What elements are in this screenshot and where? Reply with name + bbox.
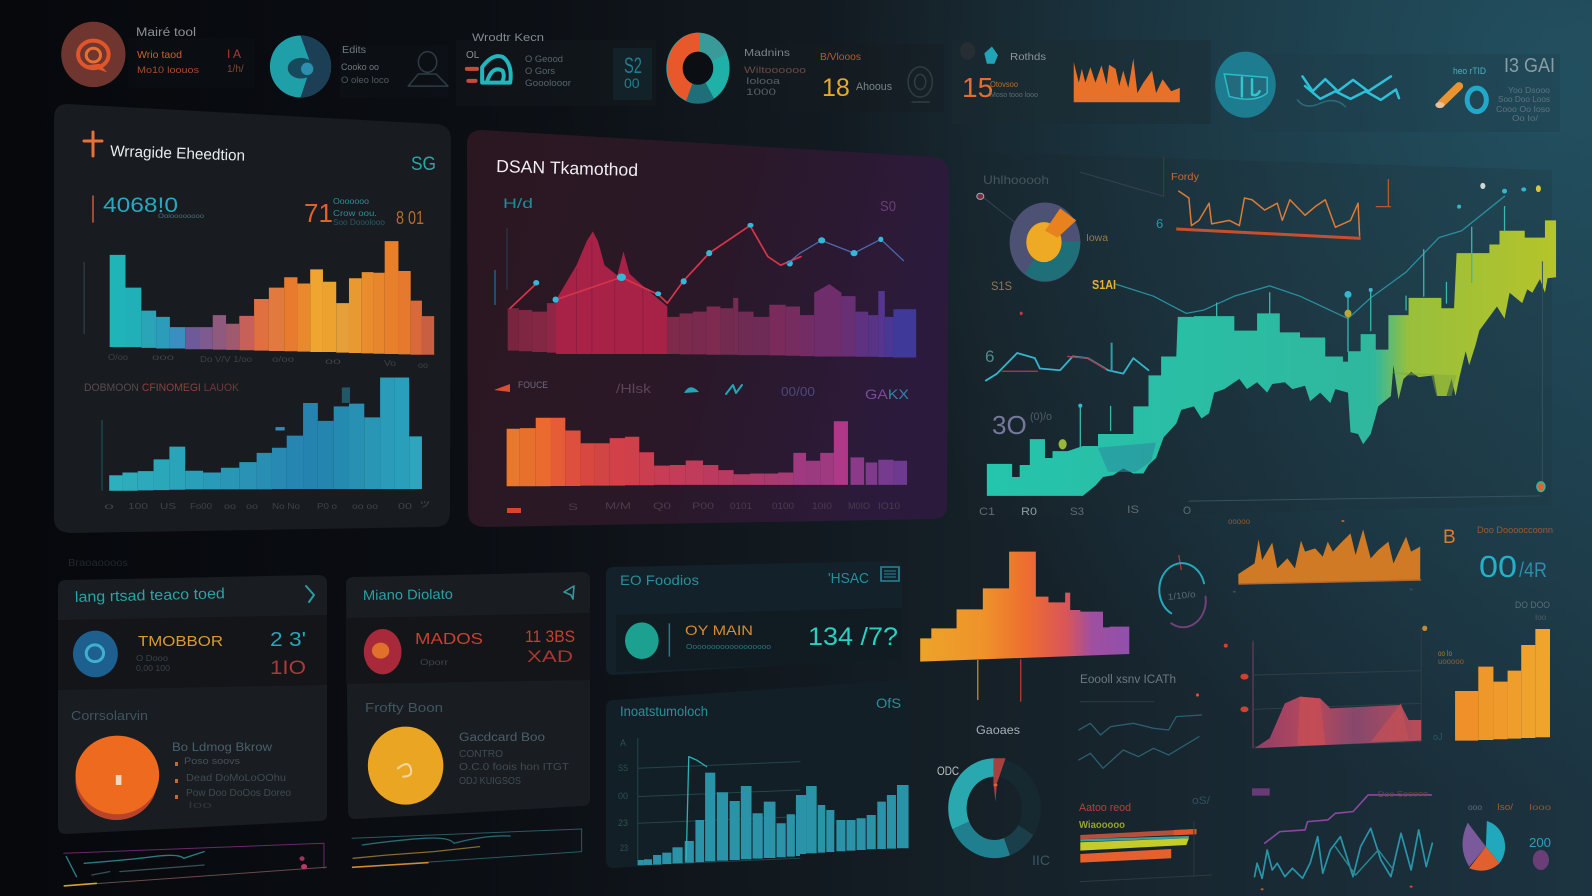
axis labels: 00 xyxy=(618,791,628,801)
metric: OY MAIN: OY MAIN xyxy=(685,622,753,638)
metric: gauge with pencil icon: Yoo Dsooo xyxy=(1508,86,1551,95)
chart: small pie xyxy=(1462,802,1551,871)
metric: OY MAIN: Oooooooooooooooooo xyxy=(686,642,771,651)
metric: gauge with pencil icon: I3 GAI xyxy=(1504,55,1555,77)
icon: blue circle xyxy=(73,631,118,677)
chart: small pie: 200 xyxy=(1529,835,1551,850)
chart: yellow pie with orange slice: 6 xyxy=(1156,216,1163,231)
heading: panel title: DSAN Tkamothod xyxy=(496,156,638,180)
value label: OfS xyxy=(876,695,901,711)
metric: donut label: Iolooa xyxy=(746,76,780,86)
metric row: Ooloooooooo xyxy=(158,214,205,220)
chart: teal donut xyxy=(948,758,1041,858)
metric: B 00: B xyxy=(1443,527,1456,548)
axis labels: bottom chart: 00 xyxy=(398,501,412,511)
chart: horizontal stripes xyxy=(1079,795,1212,882)
legend row: /Hlsk xyxy=(616,381,652,396)
chart title: donut: Gaoaes xyxy=(976,723,1020,737)
metric row: 4068!0 xyxy=(103,194,178,217)
axis labels: A xyxy=(620,738,626,748)
metric: second summary: Edits xyxy=(342,44,366,56)
chart: yellow pie with orange slice: Iowa xyxy=(1086,233,1108,244)
subheading: Corrsolarvin xyxy=(71,708,148,723)
panel: OY MAIN metric card xyxy=(606,561,902,675)
heading: mid lines: Eoooll xsnv ICATh xyxy=(1080,674,1176,686)
metric: second summary: Cooko oo xyxy=(341,62,379,73)
legend text: CONTRO xyxy=(459,749,503,760)
panel: crimson line and bar card xyxy=(467,130,949,527)
icon: red circle xyxy=(364,629,402,674)
axis labels: bottom chart: Fo00 xyxy=(190,501,212,511)
header value and icon: 'HSAC xyxy=(828,570,869,587)
metric: MADOS: XAD xyxy=(527,647,573,666)
metric: third summary with teal icon xyxy=(466,32,652,100)
heading: panel label: Uhlhooooh xyxy=(983,173,1049,187)
axis labels: 23 xyxy=(620,843,628,853)
metric: gauge with pencil icon: Oo Io/ xyxy=(1512,114,1539,123)
bar chart: teal xyxy=(638,738,909,865)
metric row: Ooooooo xyxy=(333,196,369,206)
icon: ring gauge xyxy=(1159,555,1206,627)
icon: teal arrow xyxy=(564,586,574,599)
legend text: O.C.0 foois hon ITGT xyxy=(459,762,569,773)
donut labels: IIC xyxy=(1032,852,1050,868)
sparkline strip one xyxy=(64,843,327,886)
metric: gauge with pencil icon xyxy=(1435,55,1555,123)
chart: horizontal stripes: oS/ xyxy=(1192,795,1211,807)
axis labels: bottom chart: o xyxy=(104,501,115,511)
metric: 15 with orange bars: Otovsoo xyxy=(990,80,1019,89)
bar chart: orange right: uooooo xyxy=(1438,657,1465,666)
bar chart: blue xyxy=(102,377,422,491)
bar chart: orange to purple xyxy=(507,418,907,486)
chart: small pie: Iso/ xyxy=(1497,802,1514,812)
panel: multi chart growth panel xyxy=(968,152,1556,520)
metric: 15 with orange bars: 15 xyxy=(962,72,993,103)
chart: small pie: Iooo xyxy=(1529,802,1551,812)
axis labels: growth chart: S3 xyxy=(1070,506,1084,518)
metric: MADOS: Oporr xyxy=(420,658,448,667)
metric: B 00: Ioo xyxy=(1535,613,1547,622)
axis labels: crimson chart: M0IO xyxy=(848,501,870,511)
chart: yellow pie with orange slice: S1S xyxy=(991,279,1012,293)
chart: dim blue lines xyxy=(1079,693,1202,768)
axis labels: top chart: o/oo xyxy=(272,354,294,364)
legend text: Gacdcard Boo xyxy=(459,732,545,744)
legend text: Ioo xyxy=(188,800,212,810)
heading: card title: EO Foodios xyxy=(620,572,699,588)
axis labels: 23 xyxy=(618,818,628,828)
legend text xyxy=(172,740,291,810)
chart: orange spike area xyxy=(1233,520,1421,593)
chart: orange and teal donut xyxy=(666,33,730,104)
metric: 15 with orange bars: Moso tooo looo xyxy=(990,90,1038,99)
metric row: Soo Dooolooo xyxy=(333,217,385,227)
axis labels: growth chart: IS xyxy=(1127,504,1139,516)
axis labels: crimson chart: Q0 xyxy=(653,501,671,511)
axis labels: bottom chart: P0 o xyxy=(317,501,337,511)
axis labels: crimson chart: IO10 xyxy=(878,501,900,511)
metric: TMOBBOR: O Dooo xyxy=(136,653,168,663)
axis labels: growth chart: O xyxy=(1183,505,1191,517)
legend text: Dead DoMoLoOOhu xyxy=(186,773,286,784)
metric: MADOS: 11 3BS xyxy=(525,627,575,646)
legend text: Bo Ldmog Bkrow xyxy=(172,740,272,754)
middle row band xyxy=(58,615,327,690)
icon: orange swirl circle xyxy=(61,22,126,87)
axis labels: crimson chart: M/M xyxy=(605,501,631,511)
metric: third summary with teal icon: O Gors xyxy=(525,66,555,77)
metric: second summary xyxy=(341,44,389,86)
metric: first summary xyxy=(136,27,244,76)
metric: TMOBBOR: 2 3' xyxy=(270,629,306,651)
panel: MADOS card xyxy=(346,572,590,819)
top strip cards xyxy=(128,38,1560,132)
axis labels: top chart: Do V/V 1/oo xyxy=(200,354,252,364)
metric: first summary: 1/h/ xyxy=(227,64,244,75)
legend row: FOUCE xyxy=(518,380,548,391)
axis labels: bottom chart: oo xyxy=(224,501,236,511)
panel: TMOBBOR card xyxy=(58,575,327,834)
panel: histogram card xyxy=(54,104,451,533)
axis labels: SS xyxy=(618,763,628,773)
axis labels: crimson chart: 10I0 xyxy=(812,501,832,511)
metric: 18: B/Vlooos xyxy=(820,52,861,63)
metric: third summary with teal icon: Wrodtr Kecn xyxy=(472,32,544,44)
subheading: second chart: DOBMOON CFINOMEGI LAUOK xyxy=(84,382,240,394)
panel: teal bar chart card xyxy=(606,680,911,868)
chart: orange spark line xyxy=(1164,157,1391,238)
chart: cyan pulse line xyxy=(985,343,1148,381)
chart: horizontal stripes: Wiaooooo xyxy=(1079,820,1125,831)
icon: person outline xyxy=(408,52,448,86)
chart: purple and teal lines xyxy=(1252,788,1432,890)
metric: OY MAIN: 134 /7? xyxy=(808,623,898,651)
chart: orange disk xyxy=(76,736,159,820)
axis labels: bottom chart: ﾂ xyxy=(420,499,430,509)
metric: third summary with teal icon: OL xyxy=(466,50,480,61)
metric: 15 with orange bars xyxy=(960,42,1180,103)
metric: gauge with pencil icon: Cooo Oo Ioso xyxy=(1496,105,1551,114)
left axis and legend marks: H/d xyxy=(503,195,533,211)
chart: orange to purple histogram xyxy=(920,552,1129,702)
heading: card title: Miano Diolato xyxy=(363,586,453,603)
metric: first summary: I A xyxy=(227,47,241,61)
axis labels: top chart: oo xyxy=(418,360,428,370)
metric: first summary: Mo10 loouos xyxy=(137,65,199,76)
legend row: GAKX xyxy=(865,386,910,402)
icon: orange plus xyxy=(84,132,102,156)
chart: small pie: ooo xyxy=(1468,803,1483,812)
metric: third summary with teal icon: S2 xyxy=(624,53,642,78)
axis labels: top chart xyxy=(108,352,428,370)
metric: 18: Ahoous xyxy=(856,81,892,93)
legend text: ODJ KUIGSOS xyxy=(459,776,521,787)
axis labels: bottom chart: oo oo xyxy=(352,501,378,511)
axis labels: top chart: O/oo xyxy=(108,352,128,362)
metric: 18 xyxy=(820,52,932,102)
metric: donut label: 1000 xyxy=(746,87,776,97)
chart: yellow pie with orange slice xyxy=(977,172,1164,293)
metric row: Crow oou. xyxy=(333,208,377,218)
metric: third summary with teal icon: O Geood xyxy=(525,54,563,65)
metric: B 00: DO DOO xyxy=(1515,600,1550,611)
metric: gauge with pencil icon: heo rTID xyxy=(1453,66,1486,76)
axis labels: bottom chart: 100 xyxy=(128,501,148,511)
metric: 18: 18 xyxy=(822,74,850,102)
chart: horizontal stripes: Aatoo reod xyxy=(1079,802,1131,814)
legend row xyxy=(494,380,910,402)
icon: teal badge circle xyxy=(1215,52,1276,118)
axis labels: crimson chart: S xyxy=(568,502,578,512)
axis labels xyxy=(618,738,628,853)
donut labels: ODC xyxy=(937,764,959,778)
line chart with teal nodes xyxy=(510,223,904,308)
legend row: 00/00 xyxy=(781,384,815,399)
metric: B 00 xyxy=(1443,525,1553,622)
metric: 30: 3O xyxy=(992,410,1027,440)
icon: teal chevron xyxy=(306,586,314,602)
chart: crimson bars with peak xyxy=(508,231,916,357)
heading: panel title: Wrragide Eheedtion xyxy=(110,143,245,165)
metric: donut label xyxy=(744,47,806,97)
axis labels: crimson chart: 0100 xyxy=(772,501,794,511)
chart: cyan pulse line: 6 xyxy=(985,347,994,366)
metric: first summary: Wrio taod xyxy=(137,49,182,61)
header value and icon xyxy=(828,567,899,587)
metric: second summary: O oleo loco xyxy=(341,75,389,86)
metric: B 00: 00 xyxy=(1479,549,1517,584)
axis labels: top chart: oo xyxy=(325,356,341,366)
metric: 15 with orange bars: Rothds xyxy=(1010,52,1046,63)
bar chart: orange right: oJ xyxy=(1433,732,1443,742)
metric: TMOBBOR: 1IO xyxy=(270,658,306,679)
axis labels: growth chart: C1 xyxy=(979,506,995,518)
axis labels: bottom chart: US xyxy=(160,501,176,511)
metric: TMOBBOR xyxy=(136,629,306,679)
heading: card title: lang rtsad teaco toed xyxy=(75,585,225,606)
top status strip xyxy=(61,22,1560,132)
axis labels: bottom chart: No No xyxy=(272,501,300,511)
bar chart: orange right xyxy=(1433,629,1550,742)
metric: third summary with teal icon: Gooolooor xyxy=(525,78,571,89)
bar chart: teal to orange xyxy=(84,241,434,355)
chart: stepped growth area xyxy=(987,183,1556,501)
donut labels xyxy=(937,764,1050,868)
axis labels: crimson chart xyxy=(507,501,900,513)
metric: MADOS: MADOS xyxy=(415,631,483,648)
metric: first summary: Mairé tool xyxy=(136,27,196,39)
icon: teal mark: SG xyxy=(411,154,436,175)
axis labels: bottom chart xyxy=(104,499,430,511)
metric row: 71 xyxy=(304,198,333,228)
metric row: 8 01 xyxy=(396,208,424,228)
heading: card title: Inoatstumoloch xyxy=(620,704,708,719)
metric: donut label: Madnins xyxy=(744,47,790,59)
inner row xyxy=(616,608,902,672)
left axis and legend marks xyxy=(495,195,896,305)
legend text xyxy=(459,732,569,787)
left axis and legend marks: S0 xyxy=(880,198,896,215)
subheading: Frofty Boon xyxy=(365,701,443,715)
chart: yellow pie with orange slice: S1AI xyxy=(1092,277,1116,292)
metric: B 00: /4R xyxy=(1519,559,1547,582)
metric: MADOS xyxy=(415,627,575,667)
text: 1/10/o xyxy=(1167,589,1196,602)
sparkline strip two xyxy=(352,829,582,867)
section label: Braoaoooos xyxy=(68,557,128,569)
metric: third summary with teal icon: 00 xyxy=(624,75,640,91)
legend text: Pow Doo DoOos Doreo xyxy=(186,788,291,799)
middle row band xyxy=(346,613,590,684)
metric: TMOBBOR: TMOBBOR xyxy=(138,633,223,650)
metric: B 00: Doo Dooooccoonn xyxy=(1477,525,1553,536)
metric: 30: (0)/o xyxy=(1030,411,1052,423)
chart: area with red peaks xyxy=(1224,626,1427,748)
chart: teal waves xyxy=(1297,76,1399,107)
metric: donut label: Wiltoooooo xyxy=(744,65,806,76)
axis labels: growth chart: R0 xyxy=(1021,506,1037,518)
chart labels: Doo Sooooo xyxy=(1378,789,1429,799)
axis labels: top chart: ooo xyxy=(152,352,174,362)
metric: OY MAIN xyxy=(625,622,898,659)
axis labels: crimson chart: P00 xyxy=(692,501,714,511)
legend text: Poso soovs xyxy=(184,756,240,767)
icon: teal split circle xyxy=(270,35,331,97)
metric: TMOBBOR: 0,00 100 xyxy=(136,663,170,673)
chart label: ooooo xyxy=(1228,517,1251,526)
metric: gauge with pencil icon: Soo Doo Loos xyxy=(1498,95,1550,104)
metric: 30 xyxy=(992,410,1052,440)
axis labels: crimson chart: 0101 xyxy=(730,501,752,511)
bar chart: orange right: oo Io xyxy=(1438,648,1452,658)
chart: orange spark line: Fordy xyxy=(1171,171,1200,183)
metric row xyxy=(93,194,424,228)
axis labels: growth chart xyxy=(979,504,1191,518)
axis labels: bottom chart: oo xyxy=(246,501,258,511)
chart: yellow disk xyxy=(368,727,443,805)
axis labels: top chart: Vo xyxy=(384,358,396,368)
